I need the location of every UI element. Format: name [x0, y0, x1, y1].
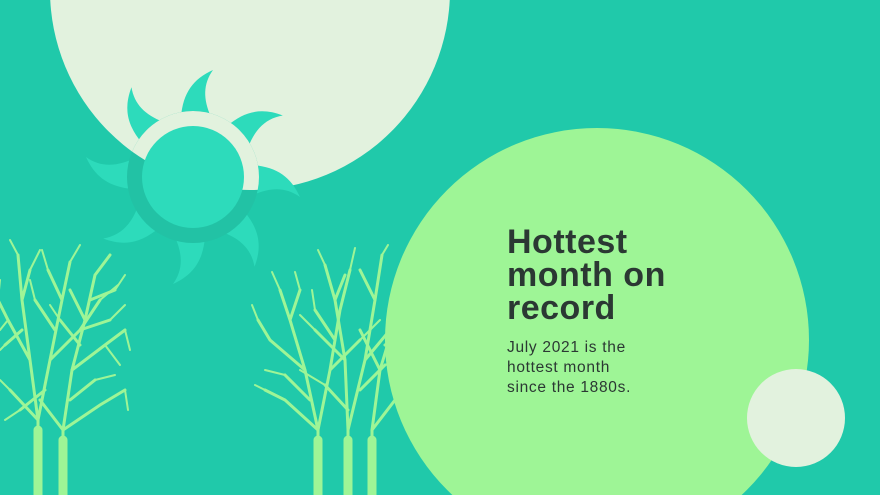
title: Hottest	[507, 223, 628, 261]
body text: July 2021 is the	[507, 339, 626, 356]
pale big circle	[50, 0, 450, 190]
small pale circle	[747, 369, 845, 467]
trees left	[0, 240, 130, 495]
title: record	[507, 289, 616, 327]
body text: hottest month	[507, 359, 610, 376]
body text	[507, 339, 631, 396]
title: month on	[507, 256, 666, 294]
body text: since the 1880s.	[507, 379, 631, 396]
title	[507, 223, 666, 327]
icon: sun	[86, 70, 300, 284]
trees right	[252, 245, 402, 495]
green circle	[385, 128, 809, 495]
